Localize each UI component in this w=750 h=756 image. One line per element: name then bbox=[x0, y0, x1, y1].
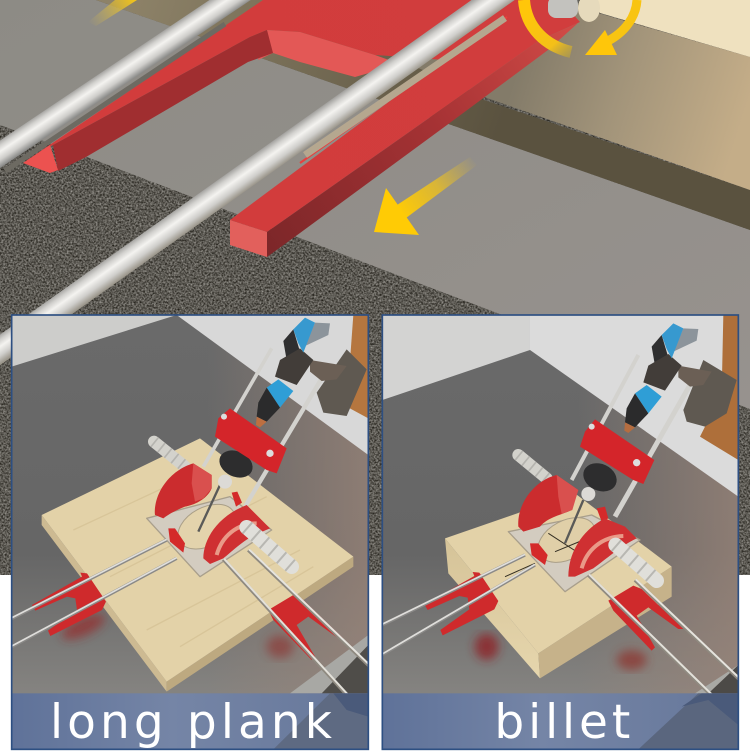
lower rods left second bbox=[380, 565, 535, 656]
drill handle bbox=[310, 360, 347, 381]
lower rods left second highlight bbox=[380, 564, 535, 655]
right arc bbox=[606, 0, 637, 42]
threaded screw end bbox=[548, 0, 600, 22]
left arc bbox=[524, 0, 571, 52]
lower rods left highlight bbox=[10, 539, 167, 619]
drill nose bbox=[257, 388, 280, 422]
board left side bbox=[42, 515, 167, 692]
arrow: curved rotation bbox=[524, 0, 637, 55]
wood board bbox=[42, 438, 353, 692]
panel: billet bbox=[380, 315, 741, 750]
battery bbox=[317, 349, 367, 416]
drill bbox=[624, 323, 712, 433]
drill blue handle bbox=[293, 318, 315, 353]
top scene: close-up of red guide fork against wood bbox=[0, 0, 750, 575]
red half-disk right bbox=[568, 518, 637, 577]
red clamp right bbox=[268, 595, 343, 660]
threaded rod back bbox=[154, 442, 185, 467]
rod shadow: left bbox=[5, 24, 225, 171]
wood top face bbox=[590, 0, 750, 57]
bracket left bbox=[168, 528, 185, 553]
arrow shaft bbox=[397, 157, 477, 218]
metal base plate bbox=[147, 495, 272, 577]
red clamp left bbox=[424, 572, 498, 635]
guide rod left bbox=[572, 355, 638, 480]
rod ribs bbox=[616, 545, 657, 581]
guide rod left bbox=[203, 348, 272, 467]
guide rod right bbox=[245, 378, 322, 507]
lower rod right bbox=[222, 559, 346, 694]
threaded rod back bbox=[518, 455, 547, 478]
lower rod right second bbox=[248, 550, 370, 667]
lower rod right second highlight bbox=[636, 579, 741, 679]
left wall bbox=[382, 315, 530, 400]
clamp bolt left bbox=[221, 414, 227, 420]
lower rods left bbox=[380, 555, 525, 626]
threaded rod front bbox=[247, 527, 292, 567]
clamp body bbox=[215, 408, 287, 473]
label bar see-through corner bbox=[273, 693, 368, 749]
red half-disk left bbox=[155, 463, 212, 518]
red reflections bbox=[59, 609, 293, 658]
black collet bbox=[215, 445, 257, 483]
right wall bbox=[177, 315, 368, 455]
table corner gap bbox=[320, 643, 368, 693]
chuck bbox=[218, 475, 232, 489]
drill bbox=[256, 318, 367, 427]
inner pink face bbox=[258, 30, 400, 77]
left reflection bbox=[475, 633, 499, 660]
rod body bbox=[518, 455, 547, 478]
left prong side face bbox=[53, 30, 273, 171]
rod body bbox=[154, 442, 185, 467]
lower rods left second bbox=[10, 558, 177, 648]
label bar dark corner bbox=[682, 693, 738, 725]
board top bbox=[42, 438, 353, 682]
drill grip bbox=[283, 329, 300, 360]
grey slab bbox=[0, 0, 750, 409]
right reflection bbox=[617, 650, 647, 670]
arrow: yellow straight bbox=[374, 157, 477, 235]
marking lines bbox=[505, 533, 583, 577]
drill copper tip bbox=[256, 417, 267, 427]
table surface bbox=[382, 315, 738, 749]
red fork guide bbox=[23, 0, 580, 257]
drill body bbox=[643, 354, 682, 391]
right prong side face bbox=[267, 23, 578, 257]
board right side bbox=[167, 557, 353, 692]
right reflection bbox=[267, 635, 293, 658]
label text: long plank bbox=[50, 695, 333, 750]
clamp bolt left bbox=[589, 424, 595, 430]
rod shadow: right bbox=[305, 18, 505, 155]
table surface bbox=[12, 316, 368, 694]
fork top surface bbox=[23, 0, 580, 232]
left wall bbox=[12, 315, 177, 367]
black collet bbox=[579, 458, 621, 497]
lower rods left second highlight bbox=[10, 558, 177, 647]
label bar bbox=[12, 693, 368, 749]
drill bit bbox=[198, 485, 220, 532]
steel rod: left bbox=[0, 0, 245, 161]
curved arrow head bbox=[585, 30, 617, 55]
table warm tint bbox=[382, 315, 738, 695]
drill light panel bbox=[673, 328, 698, 352]
drill bit bbox=[565, 500, 583, 543]
screw silver end bbox=[548, 0, 578, 18]
lower rod right second highlight bbox=[249, 549, 371, 666]
top red clamp bbox=[215, 408, 287, 473]
threaded rod front bbox=[616, 545, 657, 581]
drill body bbox=[275, 348, 313, 385]
half-disk left lighter face bbox=[192, 463, 212, 502]
right wall bbox=[530, 315, 738, 497]
concrete floor bbox=[0, 0, 750, 575]
drill blue band bbox=[267, 379, 293, 408]
rod ribs bbox=[518, 455, 547, 478]
block left side bbox=[445, 538, 540, 678]
lower rods left highlight bbox=[380, 554, 525, 625]
red clamp left bbox=[32, 573, 106, 636]
red clamp right bbox=[608, 586, 683, 651]
chuck bbox=[581, 487, 595, 501]
lower rod right highlight bbox=[224, 558, 348, 694]
wood block bbox=[445, 493, 672, 678]
battery bbox=[683, 360, 737, 427]
arrow head bbox=[374, 188, 419, 235]
panel border bbox=[382, 315, 738, 749]
rod ribs bbox=[247, 527, 292, 567]
label bar dark corner bbox=[333, 693, 368, 717]
red half-disk left bbox=[518, 475, 578, 532]
clamp body bbox=[580, 419, 654, 484]
table corner edge bbox=[695, 665, 738, 693]
half-disk left lighter face bbox=[557, 475, 578, 514]
left prong tip bbox=[23, 145, 58, 173]
red reflections bbox=[475, 633, 647, 670]
clamp bolt right bbox=[266, 450, 274, 457]
lower rod right bbox=[588, 575, 740, 723]
plate opening bbox=[178, 504, 234, 550]
steel rod: right bbox=[0, 0, 510, 357]
bracket right bbox=[232, 492, 242, 507]
right prong tip bbox=[230, 220, 267, 257]
right prong highlight line bbox=[300, 17, 507, 163]
half-disk right scale bbox=[582, 536, 623, 568]
plate bbox=[147, 497, 272, 577]
small yellow arrow tail bbox=[88, 0, 137, 26]
red half-disk right bbox=[203, 505, 270, 564]
rod body bbox=[247, 527, 292, 567]
plate bbox=[508, 515, 640, 592]
screw tip cap bbox=[578, 0, 600, 22]
drill handle bbox=[678, 366, 712, 387]
label text: billet bbox=[494, 695, 630, 750]
panel border bbox=[12, 315, 368, 749]
lower rod right second bbox=[635, 580, 740, 680]
wood front face bbox=[400, 0, 750, 190]
table corner edge bbox=[290, 635, 368, 693]
drill blue handle bbox=[662, 323, 683, 358]
board grain bbox=[73, 483, 313, 647]
lower rods left bbox=[10, 540, 167, 619]
table warm tint bbox=[244, 364, 368, 692]
clamp bolt right bbox=[633, 459, 640, 466]
door frame wood bbox=[350, 316, 368, 418]
guide rod right bbox=[615, 385, 690, 517]
door frame wood bbox=[700, 315, 738, 460]
block top bbox=[445, 493, 672, 653]
rod body bbox=[616, 545, 657, 581]
lower rod right highlight bbox=[589, 574, 741, 723]
left reflection bbox=[59, 609, 108, 644]
label bar see-through corner bbox=[638, 693, 738, 749]
drill light panel bbox=[305, 323, 330, 346]
label bar bbox=[382, 693, 738, 749]
drill nose bbox=[625, 393, 648, 427]
top red clamp bbox=[580, 419, 654, 484]
wood shadow band bbox=[96, 0, 750, 230]
rod ribs bbox=[154, 442, 185, 467]
bracket left bbox=[530, 543, 548, 565]
drill blue band bbox=[635, 385, 662, 413]
block right side bbox=[538, 567, 672, 678]
half-disk right scale bbox=[217, 523, 257, 555]
bracket right bbox=[597, 507, 608, 522]
drill grip bbox=[652, 335, 668, 366]
metal base plate bbox=[508, 509, 640, 592]
table corner bbox=[708, 665, 738, 693]
panel: long plank bbox=[10, 315, 371, 750]
drill copper tip bbox=[624, 422, 635, 433]
plate opening bbox=[531, 509, 603, 571]
